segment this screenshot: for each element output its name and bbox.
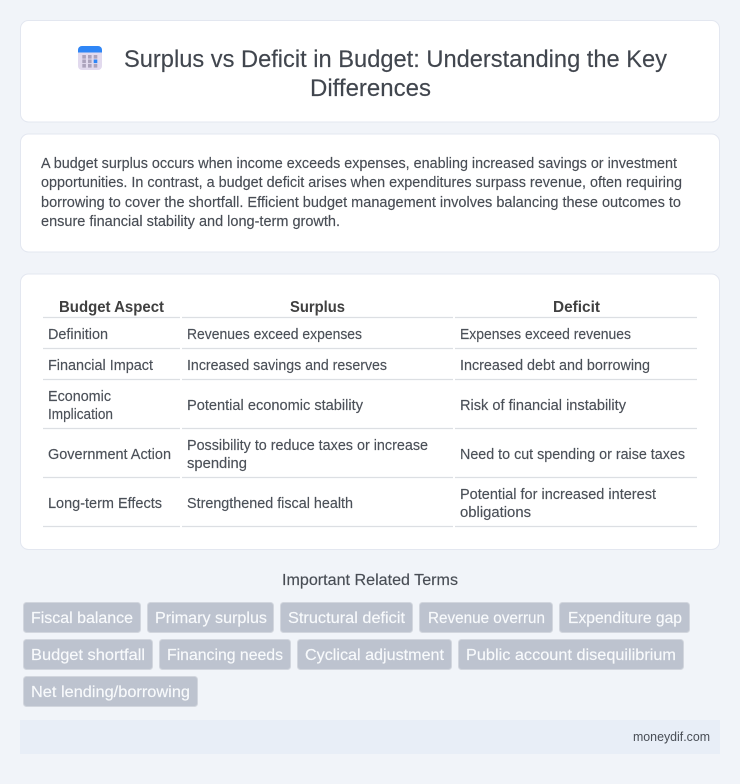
tag — [458, 640, 684, 670]
text block: description: A budget surplus occurs when income exceeds expenses, enabling increased savings or investment — [41, 156, 677, 172]
table row: economic implication: Implication — [48, 407, 113, 423]
tag — [24, 640, 152, 670]
table row: long-term effects: Long-term Effects — [48, 496, 162, 512]
table row: economic implication: Potential economic stability — [187, 398, 364, 414]
panel: description — [20, 134, 720, 252]
text block: description: ensure financial stability and long-term growth. — [41, 214, 340, 230]
table row: government action: Need to cut spending or raise taxes — [460, 447, 685, 463]
tag — [420, 602, 552, 632]
title: Differences — [310, 75, 431, 102]
tag: Net lending/borrowing — [31, 684, 190, 701]
tag: Financing needs — [167, 647, 283, 664]
footer: moneydif.com — [633, 729, 710, 744]
tag: Expenditure gap — [568, 610, 682, 627]
table row: government action — [48, 438, 685, 472]
table row: financial impact: Financial Impact — [48, 358, 153, 374]
table row: long-term effects: Potential for increased interest — [460, 487, 656, 503]
tag: Primary surplus — [155, 610, 267, 627]
table row: government action: Government Action — [48, 447, 171, 463]
tag — [24, 676, 198, 706]
table row: government action: spending — [187, 456, 247, 472]
tag: Public account disequilibrium — [466, 647, 676, 664]
table row: long-term effects: obligations — [460, 505, 531, 521]
tag — [280, 602, 412, 632]
table header row — [59, 299, 601, 316]
title: Surplus vs Deficit in Budget: Understanding the Key — [124, 46, 667, 73]
table row: financial impact: Increased debt and borrowing — [460, 358, 650, 374]
table row: government action: Possibility to reduce taxes or increase — [187, 438, 428, 454]
tag — [148, 602, 274, 632]
table row: economic implication: Economic — [48, 389, 111, 405]
tag: Budget shortfall — [31, 647, 145, 664]
text block: description: borrowing to cover the shortfall. Efficient budget management involves balancing these outcomes to — [41, 195, 681, 211]
table row: financial impact: Increased savings and reserves — [187, 358, 387, 374]
tag — [298, 640, 452, 670]
table header row: Surplus — [290, 299, 345, 316]
tag: Structural deficit — [288, 610, 406, 627]
table row: definition: Definition — [48, 327, 108, 343]
icon: calendar — [78, 46, 102, 70]
panel: title header — [20, 20, 720, 122]
table row: long-term effects: Strengthened fiscal health — [187, 496, 353, 512]
table row: financial impact — [48, 358, 650, 374]
panel: comparison table — [20, 274, 720, 550]
table row: definition: Revenues exceed expenses — [187, 327, 362, 343]
heading: important related terms: Important Related Terms — [282, 572, 458, 589]
table row: economic implication — [48, 389, 627, 423]
table row: economic implication: Risk of financial instability — [460, 398, 627, 414]
tag — [160, 640, 290, 670]
title — [124, 46, 667, 102]
table header row: Budget Aspect — [59, 299, 165, 316]
table row: definition — [48, 327, 631, 343]
footer — [20, 720, 720, 754]
text block: description: opportunities. In contrast, a budget deficit arises when expenditures surpass revenue, often requiring — [41, 175, 682, 191]
tag: Fiscal balance — [31, 610, 133, 627]
tag — [560, 602, 690, 632]
table header row: Deficit — [553, 299, 601, 316]
tag: Revenue overrun — [428, 610, 545, 627]
text block: description — [41, 156, 682, 230]
table row: long-term effects — [48, 487, 656, 521]
tag group: related terms — [24, 602, 690, 706]
table row: definition: Expenses exceed revenues — [460, 327, 631, 343]
tag: Cyclical adjustment — [305, 647, 445, 664]
tag — [24, 602, 140, 632]
